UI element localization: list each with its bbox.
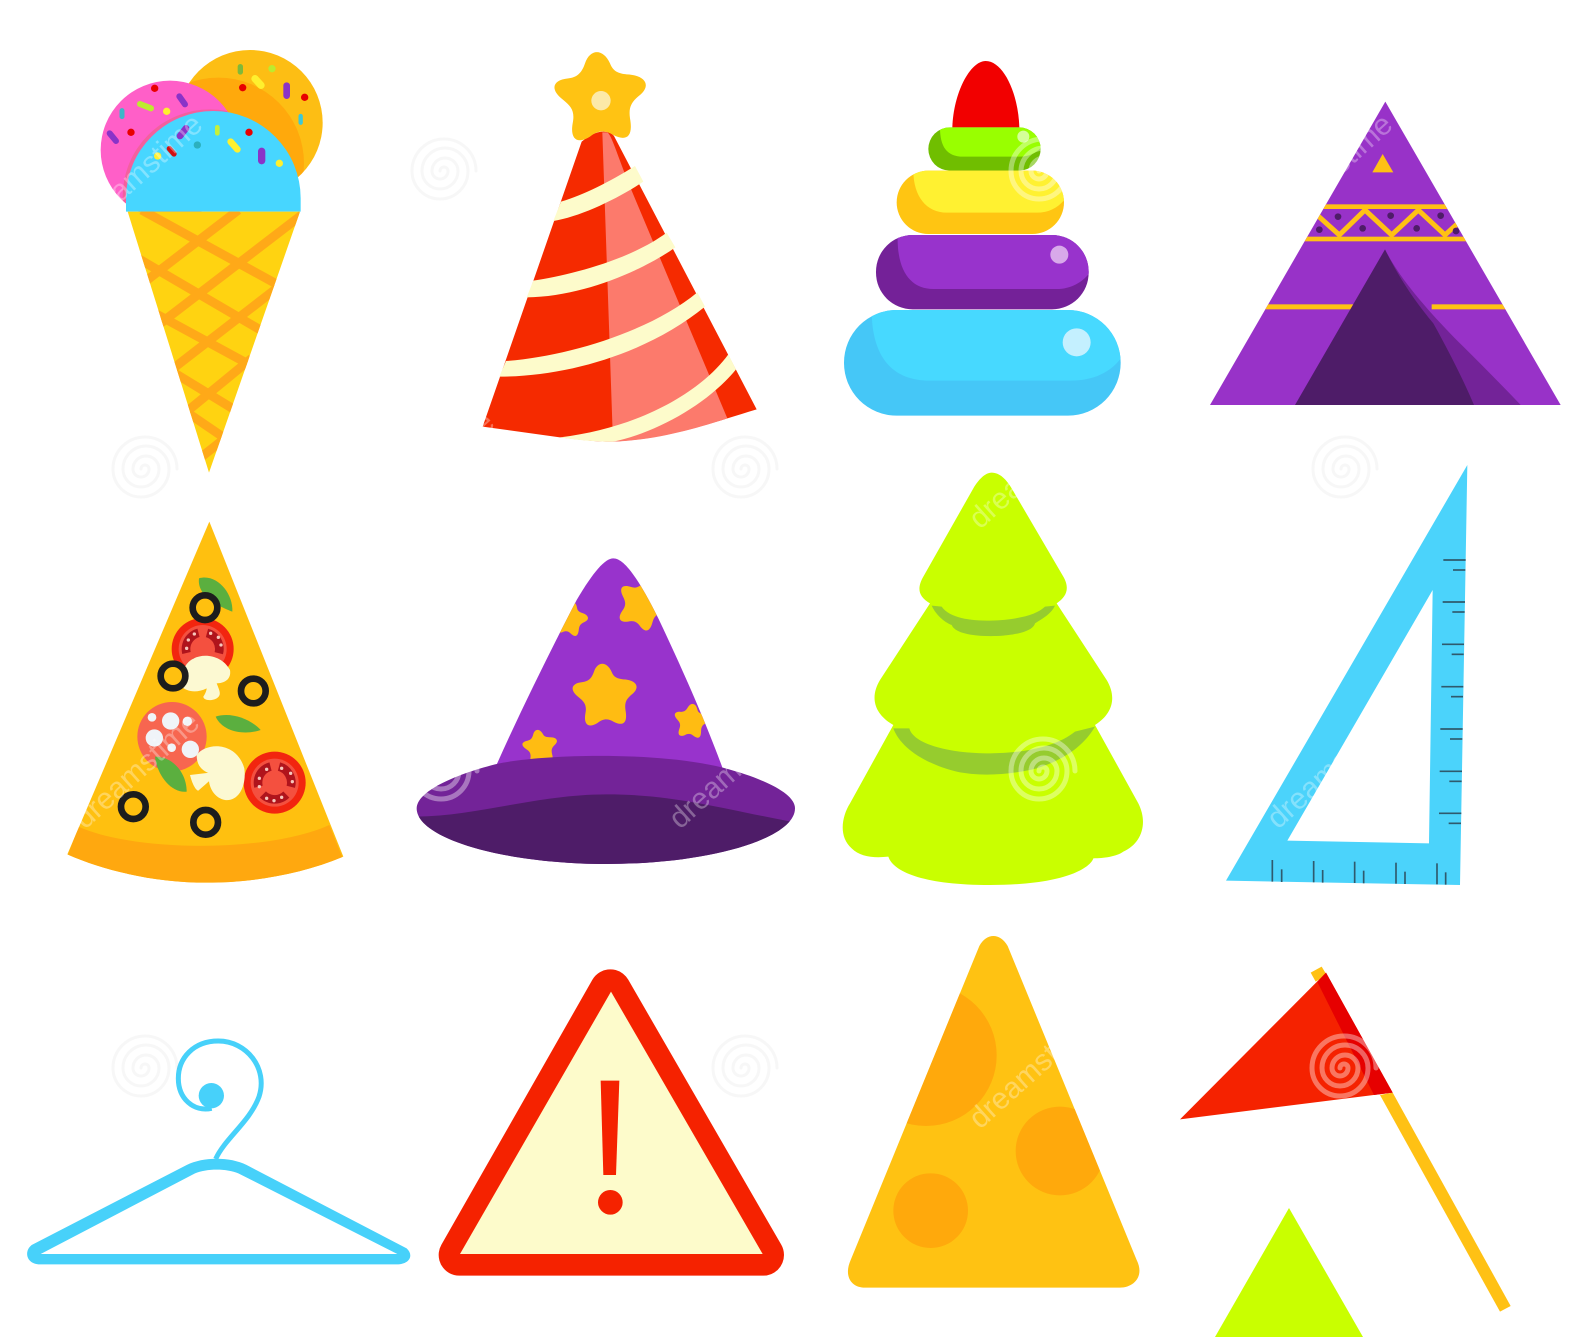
icon: green fir tree [843, 473, 1143, 885]
star topper [554, 52, 646, 140]
flag pole [1311, 967, 1511, 1312]
watermark: dreamstime [963, 1006, 1101, 1135]
icon: teepee tent [1210, 102, 1561, 405]
tent door [1295, 249, 1521, 405]
tent body [1210, 102, 1561, 405]
icon: warning sign [459, 990, 763, 1255]
green ring [928, 127, 1043, 171]
icon: cheese wedge [848, 936, 1139, 1288]
cream stripes [499, 166, 736, 442]
red rounded border [459, 990, 763, 1255]
watermark: dreamstime [71, 108, 209, 237]
watermark: dreamstime [663, 706, 801, 835]
red top [952, 61, 1019, 127]
yellow ring [897, 171, 1067, 234]
pink scoop [100, 80, 228, 212]
tomatoes [172, 618, 306, 814]
flag cloth [1180, 973, 1393, 1119]
yellow pattern bands [1265, 154, 1506, 310]
blue ring [844, 310, 1123, 416]
icon: party hat [483, 52, 757, 442]
pepperoni [137, 702, 207, 771]
watermark: dreamstime [363, 1006, 501, 1135]
icon: cropped lime triangle [1215, 1208, 1363, 1337]
orange scoop [188, 50, 323, 178]
triangle body [1226, 465, 1467, 885]
olives [121, 595, 266, 835]
icon: wizard hat [413, 558, 800, 868]
hanger body [27, 1159, 410, 1264]
tree silhouette [843, 473, 1143, 885]
icon: pizza slice [60, 522, 350, 890]
waffle cone [128, 210, 302, 473]
exclamation mark [598, 1081, 623, 1215]
basil leaves [199, 578, 261, 732]
cheese holes [893, 993, 1100, 1248]
icon: red flag on pole [1180, 967, 1511, 1312]
watermark: dreamstime [1261, 706, 1399, 835]
pizza base and crust [60, 522, 350, 890]
cream panel [460, 992, 763, 1254]
blue scoop [126, 111, 301, 212]
lower basil leaf [155, 757, 187, 792]
icon: ice cream cone [101, 50, 323, 473]
mushrooms [182, 656, 245, 800]
watermark: dreamstime [963, 406, 1101, 535]
tier shadows [893, 606, 1095, 775]
icon: stacking ring pyramid [844, 61, 1123, 416]
purple ring [876, 235, 1092, 309]
watermark: dreamstime [663, 108, 801, 237]
watermark [68, 108, 1399, 1135]
hat cone [483, 132, 757, 442]
icon: set square ruler [1226, 465, 1467, 885]
hat cone with stars [495, 558, 723, 768]
icon: clothes hanger [27, 1041, 410, 1264]
watermark: dreamstime [363, 406, 501, 535]
hat brim [413, 756, 800, 868]
hanger hook [178, 1041, 261, 1159]
ruler ticks [1272, 560, 1466, 885]
cheese body [848, 936, 1139, 1288]
watermark: dreamstime [68, 706, 206, 835]
watermark: dreamstime [1261, 108, 1399, 237]
